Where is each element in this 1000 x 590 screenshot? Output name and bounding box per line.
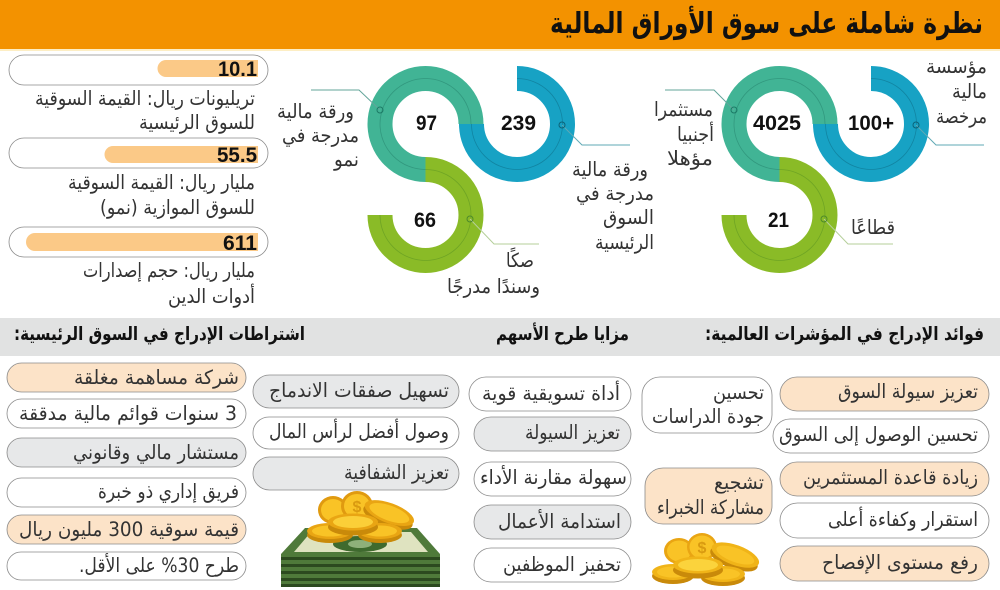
pill: stability <box>780 503 989 538</box>
heading: listing requirements: اشتراطات الإدراج في السوق الرئيسية: <box>14 324 305 345</box>
label: listed in main market: الرئيسية <box>595 231 654 254</box>
chart: market participants rings <box>654 55 987 260</box>
ring: green 21 <box>734 170 893 260</box>
label: listed in nomu: مدرجة في <box>282 124 359 147</box>
pill: sustainability: استدامة الأعمال <box>498 509 621 533</box>
pill: liquidity: تعزيز السيولة <box>525 421 620 444</box>
pill: motivating staff <box>474 548 631 582</box>
box: research quality <box>642 377 772 433</box>
pill: mergers: تسهيل صفقات الاندماج <box>269 379 449 402</box>
bar: 611 <box>9 227 268 257</box>
label: parallel market value: مليار ريال: القيمة السوقية <box>68 171 255 194</box>
label: debt issuance <box>83 259 255 308</box>
pill: market access <box>773 419 989 453</box>
pill: capital <box>253 417 459 449</box>
pill: float <box>7 552 246 580</box>
pill: disclosure <box>780 546 989 581</box>
label: foreign investors <box>654 98 714 170</box>
illustration: gold coins: $ <box>698 540 707 557</box>
label: listed in main market <box>572 158 654 254</box>
pill: float: طرح 30% على الأقل. <box>79 553 239 577</box>
panel: market value bars <box>9 55 268 308</box>
ring: green 66 <box>380 170 539 260</box>
ring: blue 239: 239 <box>501 112 536 135</box>
section header band <box>0 318 1000 356</box>
label: main market value: تريليونات ريال: القيمة السوقية <box>35 87 255 110</box>
label: sectors: قطاعًا <box>851 216 895 239</box>
box: research quality: جودة الدراسات <box>652 405 764 428</box>
label: sukuk and bonds: صكًا <box>506 247 534 272</box>
label: licensed institutions: مالية <box>952 80 987 103</box>
chart: listed securities rings <box>277 78 654 298</box>
label: listed in nomu: نمو <box>333 148 359 171</box>
panel: index benefits right column <box>773 377 989 581</box>
label: debt issuance: أدوات الدين <box>168 284 255 308</box>
ring: green 21: 21 <box>768 209 789 232</box>
panel: listing requirements list <box>7 363 246 580</box>
pill: marketing tool <box>469 377 631 411</box>
pill: disclosure: رفع مستوى الإفصاح <box>822 551 978 574</box>
pill: management team <box>7 478 246 507</box>
pill: marketing tool: أداة تسويقية قوية <box>482 381 620 405</box>
panel: listing benefits list <box>253 375 459 490</box>
label: foreign investors: مؤهلا <box>667 147 713 170</box>
label: licensed institutions <box>926 55 987 128</box>
label: debt issuance: مليار ريال: حجم إصدارات <box>83 259 255 283</box>
ring: green 66: 66 <box>414 209 436 232</box>
pill: market liquidity <box>780 377 989 411</box>
pill: benchmarking <box>474 462 631 496</box>
label: main market value <box>35 87 255 134</box>
ring: blue 100+ <box>826 78 984 170</box>
pill: liquidity <box>474 417 631 451</box>
label: sukuk and bonds <box>447 247 540 298</box>
ring: teal 97 <box>311 78 471 170</box>
label: listed in main market: السوق <box>603 206 654 229</box>
ring: blue 100+: 100+ <box>848 112 894 135</box>
label: licensed institutions: مرخصة <box>936 105 987 128</box>
label: foreign investors: مستثمرا <box>654 98 713 121</box>
bar: 611: 611 <box>223 232 257 255</box>
pill: management team: فريق إداري ذو خبرة <box>98 480 239 504</box>
pill: audited statements: 3 سنوات قوائم مالية مدققة <box>19 402 237 425</box>
pill: capital: وصول أفضل لرأس المال <box>269 419 449 443</box>
pill: closed joint stock: شركة مساهمة مغلقة <box>74 366 239 389</box>
box: expert participation: تشجيع <box>714 471 764 494</box>
illustration: gold coins <box>652 533 762 586</box>
pill: stability: استقرار وكفاءة أعلى <box>828 507 978 531</box>
title band <box>0 0 1000 51</box>
label: parallel market value: للسوق الموازية (نمو) <box>100 196 255 219</box>
pill: sustainability <box>474 505 631 539</box>
pill: closed joint stock <box>7 363 246 392</box>
pill: transparency: تعزيز الشفافية <box>344 461 449 484</box>
label: licensed institutions: مؤسسة <box>926 55 987 78</box>
pill: advisor: مستشار مالي وقانوني <box>73 441 239 464</box>
label: foreign investors: أجنبيا <box>677 122 714 146</box>
pill: investor base <box>780 462 989 496</box>
label: listed in main market: ورقة مالية <box>572 158 648 181</box>
pill: benchmarking: سهولة مقارنة الأداء <box>480 465 627 489</box>
box: expert participation <box>645 468 772 524</box>
pill: motivating staff: تحفيز الموظفين <box>503 553 621 576</box>
ring: teal 97: 97 <box>416 112 437 135</box>
ring: teal 4025: 4025 <box>753 112 801 135</box>
illustration: money stack with coins <box>281 491 440 587</box>
ring: teal 4025 <box>665 78 825 170</box>
label: sukuk and bonds: وسندًا مدرجًا <box>447 275 540 298</box>
box: expert participation: مشاركة الخبراء <box>657 496 764 519</box>
heading: IPO advantages: مزايا طرح الأسهم <box>496 322 629 345</box>
pill: investor base: زيادة قاعدة المستثمرين <box>803 466 978 489</box>
pill: mergers <box>253 375 459 408</box>
label: parallel market value <box>68 171 255 219</box>
pill: advisor <box>7 438 246 467</box>
label: listed in nomu <box>277 100 359 171</box>
label: listed in nomu: ورقة مالية <box>277 100 354 123</box>
pill: market access: تحسين الوصول إلى السوق <box>779 423 978 447</box>
illustration: money stack with coins: $ <box>353 499 362 516</box>
panel: index benefits middle column <box>642 377 772 524</box>
pill: market liquidity: تعزيز سيولة السوق <box>838 380 978 403</box>
bar: 55.5 <box>9 138 268 168</box>
panel: IPO advantages list <box>469 377 631 582</box>
pill: transparency <box>253 457 459 490</box>
label: listed in main market: مدرجة في <box>576 182 654 205</box>
bar: 10.1: 10.1 <box>218 58 257 81</box>
label: main market value: للسوق الرئيسية <box>139 111 255 134</box>
pill: market value: قيمة سوقية 300 مليون ريال <box>19 518 239 541</box>
bar: 10.1 <box>9 55 268 85</box>
box: research quality: تحسين <box>713 381 764 404</box>
ring: blue 239 <box>472 78 630 170</box>
bar: 55.5: 55.5 <box>217 144 257 167</box>
